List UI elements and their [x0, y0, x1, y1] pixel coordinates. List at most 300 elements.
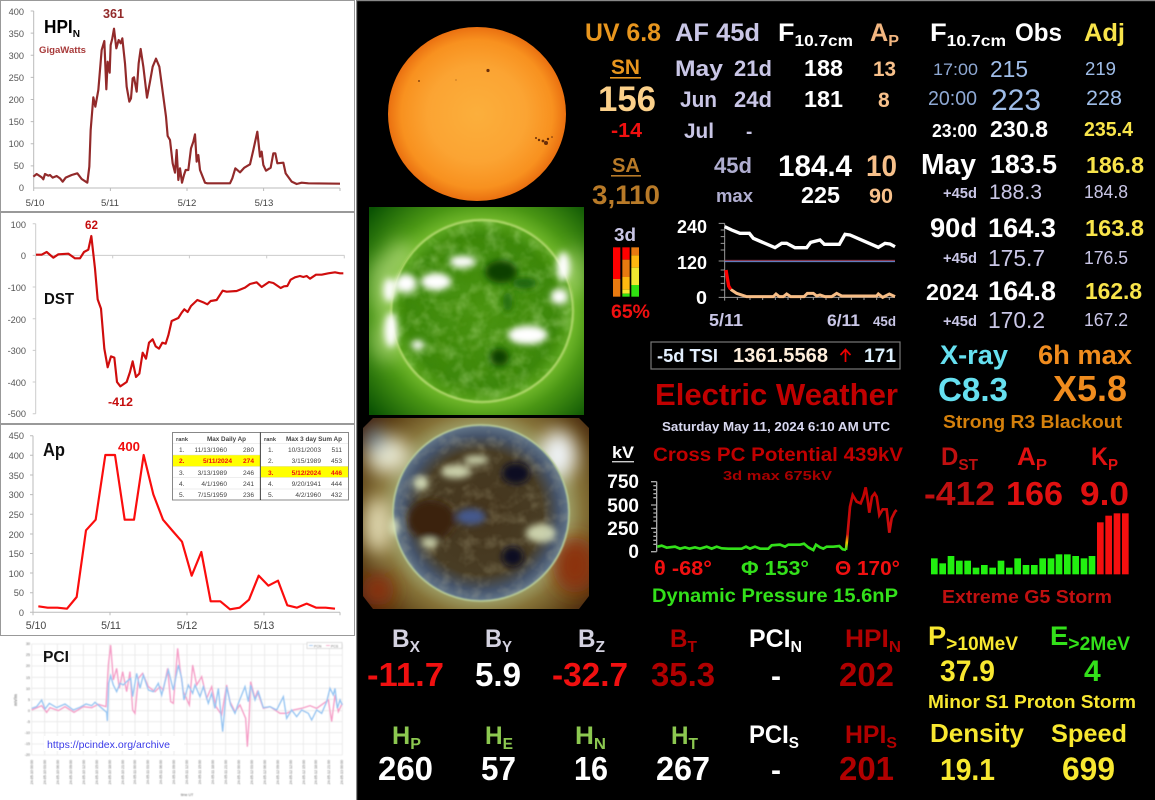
monthly table: 13 [873, 58, 896, 81]
heading row: AP: P [888, 33, 899, 50]
ranking table: 274 [243, 458, 254, 465]
Ap axis labels: 0 [19, 608, 24, 618]
ranking table: 2. [268, 458, 274, 465]
PCI axis labels: 24-05-10 03:00 [43, 760, 47, 784]
PCI and HPI north readouts: PCI [749, 625, 791, 653]
monthly table: Jun [680, 87, 717, 112]
ranking table: 511 [331, 447, 342, 454]
magnetic field readouts: -32.7 [552, 656, 628, 693]
cross polar cap potential chart [607, 443, 903, 607]
monthly table [675, 55, 897, 208]
PCI axis labels: 24-05-12 12:00 [289, 760, 293, 784]
solar wind density and speed: Speed [1051, 720, 1127, 748]
image: multicolor EUV sun [362, 418, 597, 609]
DST axis labels: 0 [21, 251, 26, 261]
ranking table: 10/31/2003 [288, 447, 321, 454]
sunspot number block: -14 [611, 120, 643, 142]
X-ray block: X5.8 [1053, 368, 1127, 409]
hemispheric field readouts: H [671, 722, 689, 750]
flux readings table: 184.8 [1084, 182, 1128, 202]
DST axis labels: -300 [8, 346, 26, 356]
magnetic field readouts: B [578, 625, 596, 653]
PCI axis labels: 5 [28, 698, 30, 702]
PCI axis labels: -20 [25, 753, 30, 757]
sunspot number block: SN [611, 56, 640, 79]
GigaWatts unit: GigaWatts [39, 45, 86, 56]
hemispheric field readouts: 57 [481, 750, 516, 787]
PCI and HPI south readouts: S [886, 735, 897, 752]
proton and electron readouts [928, 621, 1136, 712]
PCI and HPI south readouts: - [771, 754, 781, 787]
Ap line [731, 289, 895, 297]
Ap axis labels: 5/13 [254, 620, 274, 632]
HPI axis labels: 5/10 [26, 198, 44, 209]
HPI axis labels: 50 [14, 161, 24, 171]
minimum value -412: -412 [108, 395, 133, 409]
monthly table: max [716, 186, 753, 206]
heading row: F10.7cm: 10.7cm [794, 33, 853, 50]
hemispheric field readouts: P [410, 736, 421, 753]
PCI axis labels: 24-05-12 09:00 [276, 760, 280, 784]
TSI box: 171 [864, 346, 896, 367]
flux readings table: 188.3 [989, 181, 1042, 204]
45 day flux chart: 0 [696, 288, 707, 308]
PCI axis labels: 24-05-12 00:00 [237, 760, 241, 784]
Ap title: Ap [43, 440, 65, 460]
DST axis labels: -100 [8, 283, 26, 293]
heading row: AP: A [870, 19, 888, 47]
PCI axis labels: 24-05-10 09:00 [69, 760, 73, 784]
HPI line [33, 29, 340, 184]
ranking table: 11/13/1960 [194, 447, 227, 454]
recent Ap peak [726, 270, 731, 289]
HPI axis labels: 400 [9, 7, 24, 17]
PCI axis labels: 24-05-12 03:00 [250, 760, 254, 784]
HPI axis labels: 350 [9, 29, 24, 39]
PCI axis labels: 15 [26, 676, 30, 680]
cross polar cap potential chart: 500 [607, 496, 639, 517]
HPI axis labels: 150 [9, 117, 24, 127]
TSI box [651, 342, 900, 369]
hemispheric field readouts: E [503, 736, 513, 753]
Ap axis labels: 200 [9, 530, 24, 540]
proton and electron readouts: >2MeV [1068, 634, 1130, 655]
PCI legend [307, 642, 342, 648]
PCI axis labels: 24-05-11 21:00 [224, 760, 228, 784]
HPI axis labels [9, 7, 273, 209]
magnetic field readouts [367, 625, 715, 693]
magnetic field readouts: 5.9 [475, 656, 521, 693]
ranking table: 446 [331, 470, 342, 477]
ranking table: 236 [243, 492, 254, 499]
flux readings table: 162.8 [1085, 278, 1142, 304]
PCI axis labels: 24-05-12 06:00 [263, 760, 267, 784]
cross polar cap potential chart: 0 [628, 542, 639, 563]
flux readings table: 215 [990, 56, 1028, 82]
ranking table: 280 [243, 447, 254, 454]
ranking table: 444 [331, 481, 342, 488]
hemispheric field readouts: N [594, 736, 606, 753]
heading: Adj: Adj [1084, 19, 1125, 47]
ranking table: 453 [331, 458, 342, 465]
geomagnetic storm block [924, 443, 1129, 607]
magnetic field readouts: Y [502, 639, 512, 656]
Kp bars [931, 513, 1129, 574]
PCI and HPI north readouts: - [771, 660, 781, 693]
date line: Saturday May 11, 2024 6:10 AM UTC [662, 420, 890, 434]
ranking table: Max 3 day Sum Ap [286, 436, 342, 443]
PCI axis labels: 24-05-11 12:00 [185, 760, 189, 784]
X-ray block: X-ray [940, 340, 1008, 370]
proton and electron readouts: E [1050, 621, 1068, 651]
magnetic field readouts: B [485, 625, 503, 653]
flux readings table: 170.2 [988, 307, 1045, 333]
Ap axis labels: 50 [14, 588, 24, 598]
Ap axis labels: 5/10 [26, 620, 46, 632]
flux readings table: 176.5 [1084, 248, 1128, 268]
PCI axis labels: 25 [26, 653, 30, 657]
monthly table: 181 [804, 86, 843, 112]
monthly table: 10 [866, 150, 897, 183]
ranking table: 4/1/1960 [201, 481, 227, 488]
PCI axis labels: 24-05-10 12:00 [82, 760, 86, 784]
ranking table: 5/11/2024 [203, 458, 232, 465]
Ap axis labels: 150 [9, 549, 24, 559]
PCI axis labels: 24-05-11 18:00 [211, 760, 215, 784]
magnetic field readouts: Z [596, 639, 605, 656]
ranking table: rank [176, 437, 189, 443]
ranking table: 7/15/1959 [198, 492, 227, 499]
Ap line [38, 455, 335, 609]
flux readings table: 20:00 [928, 88, 977, 110]
geomagnetic storm block: Extreme G5 Storm [942, 587, 1112, 607]
PCI and HPI north readouts: HPI [845, 625, 887, 653]
cross polar cap potential chart: kV [612, 443, 635, 462]
flux readings table: 163.8 [1085, 215, 1144, 241]
cross polar cap potential chart: 3d max 675kV [723, 468, 832, 483]
magnetic field readouts: B [392, 625, 410, 653]
Ap axis labels: 450 [9, 431, 24, 441]
DST title: DST [44, 291, 74, 308]
hemispheric field readouts: 267 [656, 750, 710, 787]
panel: Ap chart [0, 424, 354, 636]
title: Electric Weather: Electric Weather [655, 377, 898, 412]
heading row: UV: UV 6.8 [585, 19, 661, 47]
3 day forecast bars: 65% [611, 301, 650, 323]
PCI axis labels: time UT [181, 793, 194, 797]
PCI axis labels: 10 [26, 687, 30, 691]
45 day flux chart: 6/11 [827, 311, 860, 330]
flux readings table: 2024 [926, 279, 978, 305]
flux readings table: May [921, 149, 976, 181]
Ap axis labels: 300 [9, 490, 24, 500]
PCI axis labels: 24-05-11 00:00 [133, 760, 137, 784]
hemispheric field readouts: H [392, 722, 410, 750]
PCI legend: PCS [331, 644, 339, 648]
Ap axis labels: 250 [9, 510, 24, 520]
PCI and HPI south readouts [749, 721, 897, 787]
geomagnetic storm block: K [1091, 443, 1109, 471]
PCI title: PCI [43, 649, 69, 666]
DST axis labels: -200 [8, 315, 26, 325]
geomagnetic storm block: 9.0 [1080, 475, 1129, 512]
cross polar cap potential chart: θ -68° [654, 558, 712, 580]
flux readings table: 230.8 [990, 116, 1048, 142]
PCI north line [32, 665, 342, 732]
X-ray block: Strong R3 Blackout [943, 412, 1122, 432]
ranking table: 9/20/1941 [292, 481, 321, 488]
ranking table: 432 [331, 492, 342, 499]
geomagnetic storm block: 166 [1006, 475, 1063, 512]
flux readings table: 186.8 [1086, 152, 1144, 178]
potential line storm [846, 487, 897, 550]
PCI axis labels: 24-05-11 09:00 [172, 760, 176, 784]
flux readings table [921, 56, 1144, 333]
monthly table: 225 [801, 182, 840, 208]
45 day flux chart: 120 [677, 253, 707, 273]
DST line [36, 236, 343, 386]
HPI axis labels: 250 [9, 73, 24, 83]
flux readings table: 219 [1085, 58, 1116, 79]
TSI box: 1361.5568 [733, 345, 828, 367]
PCI axis labels: 24-05-10 00:00 [30, 760, 34, 784]
solar wind density and speed: 699 [1062, 751, 1115, 787]
ranking table: 3. [179, 470, 185, 477]
X-ray block: C8.3 [938, 371, 1008, 408]
flux readings table: 183.5 [990, 149, 1057, 179]
sunspot area block: SA [612, 155, 640, 177]
Ap axis labels: 5/12 [177, 620, 197, 632]
heading row: AF: AF 45d [675, 19, 760, 47]
flux readings table: 23:00 [932, 121, 977, 141]
Ap axis labels: 100 [9, 569, 24, 579]
PCI legend: PCN [314, 644, 322, 648]
PCI and HPI south readouts: PCI [749, 721, 791, 749]
HPI axis labels: 0 [19, 183, 24, 193]
magnetic field readouts: B [670, 625, 688, 653]
ranking table: 3/15/1989 [292, 458, 321, 465]
cross polar cap potential chart: Θ 170° [835, 558, 900, 580]
X-ray block: 6h max [1038, 340, 1132, 370]
ranking table: 241 [243, 481, 254, 488]
flux readings table: 167.2 [1084, 310, 1128, 330]
image: visible sun [388, 27, 566, 201]
sunspot area block [592, 155, 660, 210]
flux line [725, 227, 895, 248]
cross polar cap potential chart: 750 [607, 472, 639, 493]
hemispheric field readouts: H [485, 722, 503, 750]
monthly table: 45d [714, 153, 752, 178]
monthly table: 8 [878, 89, 890, 112]
PCI axis labels: 24-05-12 21:00 [327, 760, 331, 784]
geomagnetic storm block: A [1017, 443, 1035, 471]
monthly table: 24d [734, 87, 772, 112]
proton and electron readouts: Minor S1 Proton Storm [928, 692, 1136, 712]
PCI axis labels: 24-05-11 15:00 [198, 760, 202, 784]
solar wind density and speed [930, 718, 1127, 787]
HPI axis labels: 300 [9, 51, 24, 61]
Ap axis labels [9, 431, 274, 632]
ranking table: 3. [268, 470, 274, 477]
hemispheric field readouts: H [575, 722, 593, 750]
HPI axis labels: 100 [9, 139, 24, 149]
DST axis labels [8, 220, 26, 419]
heading row: F10.7cm observed: F [930, 19, 945, 47]
flux readings table: 164.8 [988, 276, 1056, 306]
flux readings table: +45d [943, 313, 977, 330]
ranking table: 4. [179, 481, 185, 488]
HPI axis labels: 5/13 [255, 198, 273, 209]
potential line quiet [657, 544, 846, 550]
peak value 400: 400 [118, 439, 140, 454]
flux readings table: 175.7 [988, 245, 1045, 271]
heading row: F10.7cm observed: 10.7cm [947, 33, 1006, 50]
monthly table: 184.4 [778, 150, 852, 183]
magnetic field readouts: T [688, 639, 697, 656]
geomagnetic storm block: P [1108, 457, 1118, 474]
ranking table: 2. [179, 458, 185, 465]
hemispheric field readouts: 16 [574, 750, 608, 787]
flux readings table: +45d [943, 250, 977, 267]
solar wind density and speed: Density [930, 718, 1025, 748]
proton and electron readouts: P [928, 621, 946, 651]
PCI axis labels: mV/m [13, 694, 18, 706]
solar wind density and speed: 19.1 [940, 752, 995, 787]
HPI axis labels: 5/11 [101, 198, 119, 209]
panel: DST chart [0, 212, 354, 424]
DST axis labels: 100 [11, 220, 26, 230]
geomagnetic storm block: ST [958, 457, 978, 474]
flux readings table: 90d [930, 213, 977, 243]
TSI box: -5d TSI [657, 346, 718, 366]
archive URL: https://pcindex.org/archive [47, 739, 170, 751]
cross polar cap potential chart: 250 [607, 519, 639, 540]
image: green EUV sun [369, 207, 584, 415]
geomagnetic storm block: P [1036, 457, 1047, 474]
heading: Obs: Obs [1015, 19, 1062, 47]
45 day flux chart [677, 217, 896, 330]
monthly table: 21d [734, 56, 772, 81]
PCI axis labels [13, 642, 344, 797]
panel: main black dashboard [356, 0, 1155, 800]
X-ray block [938, 340, 1132, 432]
PCI and HPI north readouts: N [889, 639, 901, 656]
hemispheric field readouts: T [689, 736, 698, 753]
PCI axis labels: 24-05-10 15:00 [95, 760, 99, 784]
panel: PCI chart [13, 642, 344, 797]
PCI axis labels: 24-05-11 03:00 [146, 760, 150, 784]
ranking table: 5. [179, 492, 185, 499]
PCI axis labels: -10 [25, 731, 30, 735]
panel: HPI north chart [0, 0, 354, 212]
cross polar cap potential chart: Φ 153° [741, 558, 809, 580]
magnetic field readouts: X [410, 639, 420, 656]
ranking table: 1. [179, 447, 185, 454]
ranking table: 5/12/2024 [292, 470, 321, 477]
flux readings table: +45d [943, 185, 977, 202]
flux readings table: 228 [1086, 86, 1122, 110]
ranking table: 5. [268, 492, 274, 499]
PCI axis labels: 24-05-12 15:00 [302, 760, 306, 784]
monthly table: 90 [869, 185, 893, 208]
Ap axis labels: 350 [9, 471, 24, 481]
ranking table: rank [264, 437, 277, 443]
proton and electron readouts: 4 [1084, 655, 1101, 688]
peak value 361: 361 [103, 7, 124, 21]
magnetic field readouts: -11.7 [367, 656, 444, 693]
ranking table: Max Daily Ap [207, 436, 246, 443]
45 day flux chart: 240 [677, 217, 707, 237]
PCI and HPI south readouts: HPI [845, 721, 887, 749]
Ap axis labels: 5/11 [101, 620, 121, 632]
monthly table: Jul [684, 120, 714, 143]
PCI axis labels: -5 [27, 720, 30, 724]
Ap axis labels: 400 [9, 451, 24, 461]
cross polar cap potential chart: Dynamic Pressure 15.6nP [652, 585, 898, 607]
PCI and HPI north readouts: 202 [839, 656, 894, 693]
HPI axis labels: 200 [9, 95, 24, 105]
PCI axis labels: 24-05-10 18:00 [108, 760, 112, 784]
PCI and HPI south readouts: S [789, 735, 799, 752]
peak value 62: 62 [85, 218, 98, 232]
PCI axis labels: 0 [28, 709, 30, 713]
DST axis labels: -500 [8, 409, 26, 419]
PCI axis labels: 24-05-10 06:00 [56, 760, 60, 784]
ranking table: 1. [268, 447, 274, 454]
HPI title: N [73, 28, 80, 40]
ranking table: 246 [243, 470, 254, 477]
flux readings table: 235.4 [1084, 119, 1134, 141]
hemispheric field readouts: 260 [378, 750, 433, 787]
PCI axis labels: 24-05-12 18:00 [314, 760, 318, 784]
proton and electron readouts: >10MeV [946, 634, 1018, 655]
geomagnetic storm block: D [941, 443, 959, 471]
PCI south line [32, 645, 342, 747]
45 day flux chart: 5/11 [709, 310, 743, 330]
flux readings table: 164.3 [988, 213, 1056, 243]
HPI title: HPI [44, 17, 74, 37]
proton and electron readouts: 37.9 [940, 655, 995, 688]
sunspot area block: 3,110 [592, 180, 660, 210]
3 day forecast bars: 3d [614, 225, 636, 245]
PCI and HPI north readouts: N [790, 639, 802, 656]
monthly table: - [746, 122, 752, 143]
flux readings table: 223 [991, 84, 1041, 117]
magnetic field readouts: 35.3 [651, 656, 715, 693]
ranking table: 4. [268, 481, 274, 488]
DST axis labels: -400 [8, 378, 26, 388]
monthly table: 188 [804, 55, 843, 81]
sunspot number block [598, 56, 656, 142]
sunspot number block: 156 [598, 80, 656, 119]
3 day forecast bars [611, 225, 650, 323]
HPI axis labels: 5/12 [178, 198, 196, 209]
ranking table: 3/13/1989 [198, 470, 227, 477]
PCI and HPI north readouts [749, 625, 901, 693]
monthly table: May [675, 56, 724, 81]
geomagnetic storm block: -412 [924, 475, 995, 512]
PCI axis labels: 24-05-11 06:00 [159, 760, 163, 784]
PCI axis labels: 24-05-13 00:00 [340, 760, 344, 784]
flux readings table: 17:00 [933, 60, 978, 79]
heading row: F10.7cm: F [778, 19, 793, 47]
45 day flux chart: 45d [873, 314, 896, 329]
PCI axis labels: 24-05-10 21:00 [121, 760, 125, 784]
cross polar cap potential chart: Cross PC Potential 439kV [653, 445, 903, 466]
PCI axis labels: -15 [25, 742, 30, 746]
ranking table: 4/2/1960 [295, 492, 321, 499]
PCI axis labels: 30 [26, 642, 30, 646]
